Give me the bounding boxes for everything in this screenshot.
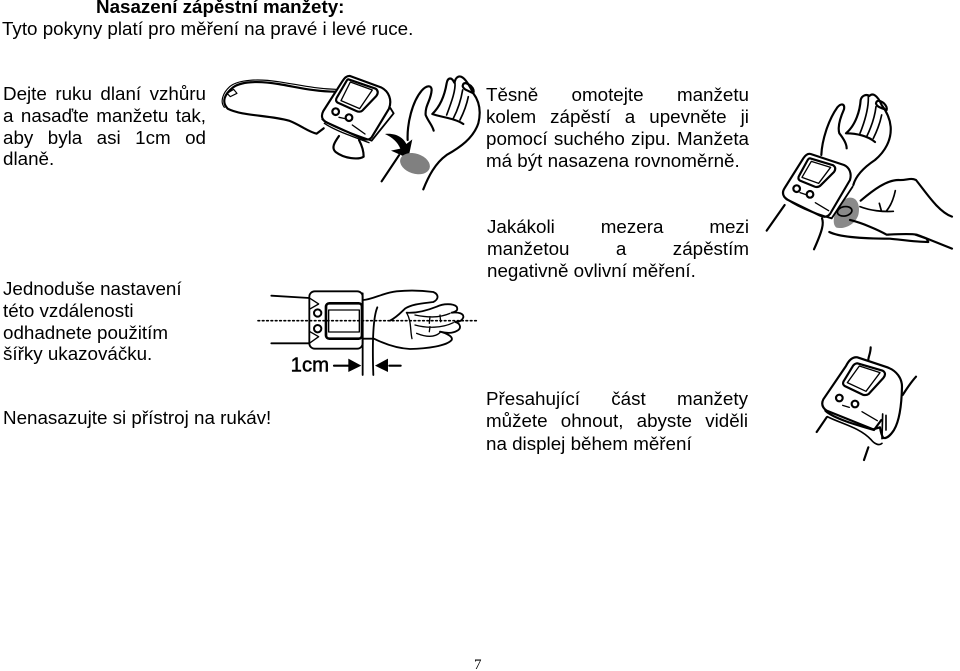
text block: wrap tightly: má být nasazena rovnoměrně. — [486, 150, 740, 171]
text block: distance estimate: odhadnete použitím — [3, 322, 168, 343]
wrist marker — [397, 149, 433, 178]
text block: overlapping cuff: na displej během měření — [486, 433, 692, 454]
text block: gap warning: negativně ovlivní měření. — [487, 260, 696, 281]
text block: overlapping cuff — [486, 388, 748, 454]
text block: wrap tightly: kolem zápěstí a upevněte ji — [486, 106, 749, 127]
arrows — [334, 362, 401, 369]
text block: sleeve warning: Nenasazujte si přístroj na rukáv! — [3, 407, 271, 428]
text block: wrap tightly: Těsně omotejte manžetu — [486, 84, 749, 105]
text block: cuff placement: a nasaďte manžetu tak, — [3, 105, 206, 126]
text block: gap warning: Jakákoli mezera mezi — [487, 216, 749, 237]
text block: cuff placement — [3, 83, 206, 169]
dotted centre line — [258, 318, 478, 323]
heading: Tyto pokyny platí pro měření na pravé i levé ruce. — [2, 18, 413, 39]
text block: gap warning — [487, 216, 749, 281]
text block: overlapping cuff: Přesahující část manžety — [486, 388, 748, 409]
heading — [2, 0, 413, 39]
wrist marker — [834, 198, 859, 228]
illustration: one centimetre distance — [258, 291, 478, 377]
text block: distance estimate: této vzdálenosti — [3, 300, 134, 321]
label: 1cm — [291, 355, 329, 377]
text block: cuff placement: dlaně. — [3, 148, 54, 169]
illustration: opening the cuff onto the wrist — [222, 76, 480, 189]
illustration: tightening the cuff — [767, 95, 952, 249]
text block: cuff placement: aby byla asi 1cm od — [3, 127, 206, 148]
text block: wrap tightly: pomocí suchého zipu. Manžeta — [486, 128, 749, 149]
icon: arrow — [385, 134, 412, 158]
illustration: overlapping cuff — [817, 347, 916, 460]
text block: distance estimate — [3, 278, 182, 364]
text block: gap warning: manžetou a zápěstím — [487, 238, 749, 259]
text block: cuff placement: Dejte ruku dlaní vzhůru — [3, 83, 206, 104]
text block: distance estimate: Jednoduše nastavení — [3, 278, 182, 299]
text block: distance estimate: šířky ukazováčku. — [3, 343, 152, 364]
text block: overlapping cuff: můžete ohnout, abyste viděli — [486, 410, 748, 431]
text block: wrap tightly — [486, 84, 749, 171]
